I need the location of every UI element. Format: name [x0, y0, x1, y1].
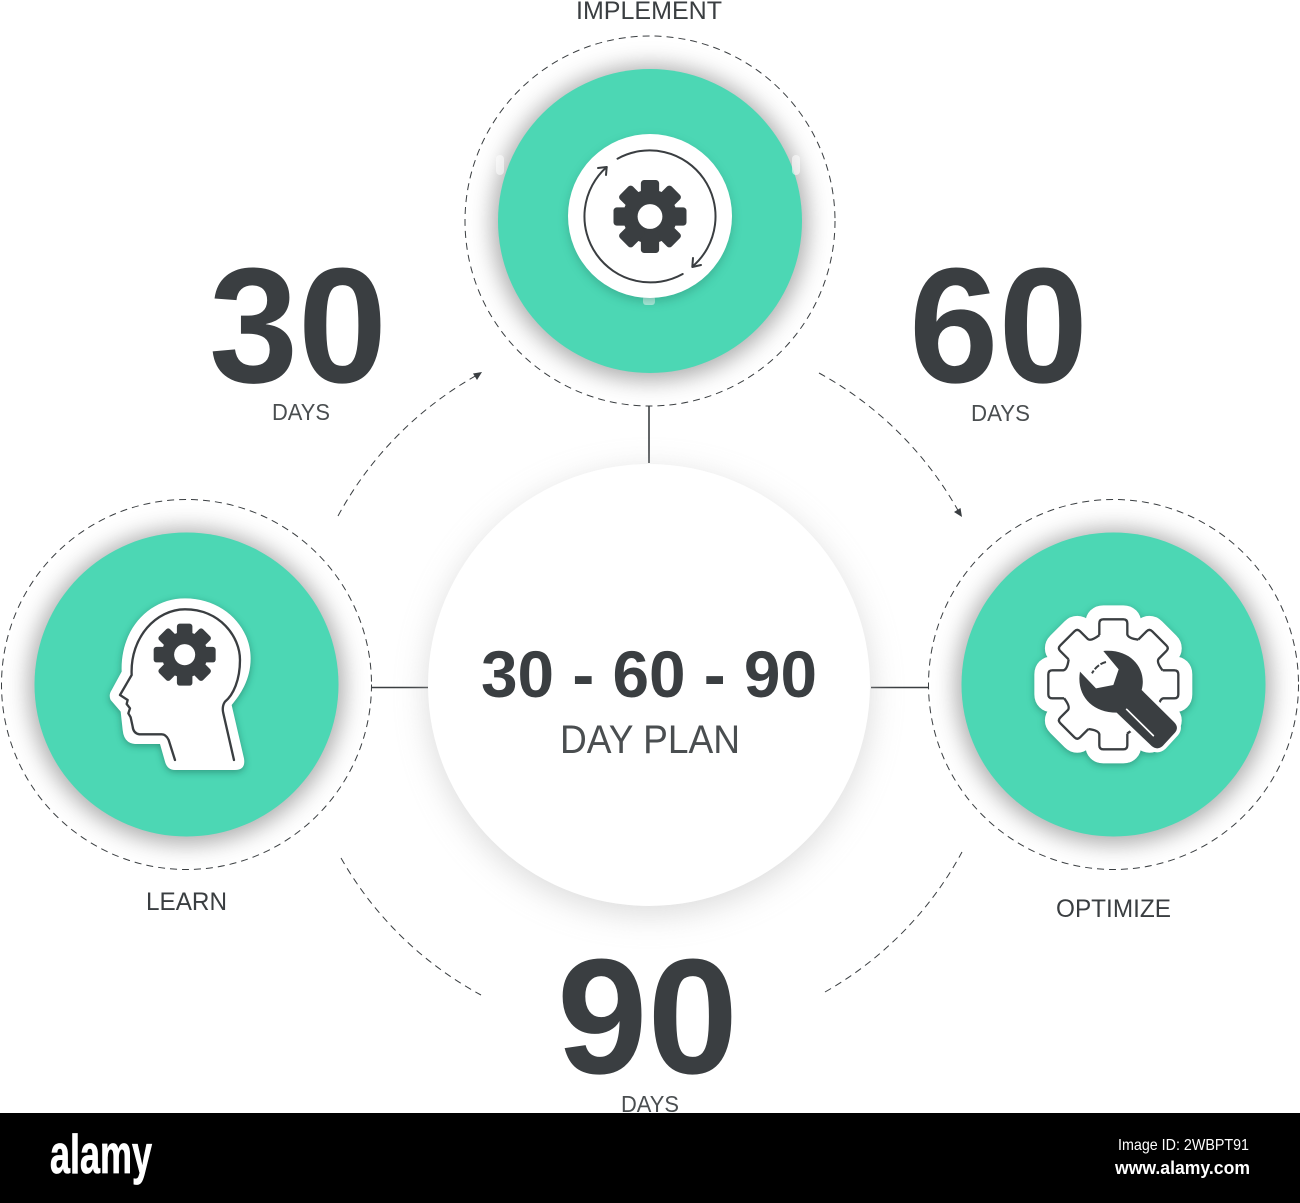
- icon: cycle arrows: [584, 150, 716, 282]
- dashed arc: bottom left: [341, 858, 481, 995]
- icon: gear: [614, 180, 686, 253]
- number: 90 days: 90: [557, 925, 738, 1108]
- centre circle: [428, 464, 870, 914]
- number: 30 days: DAYS: [272, 399, 330, 425]
- number: 90 days: DAYS: [621, 1091, 679, 1117]
- arrow: learn to implement: [338, 372, 482, 516]
- dashed arc: bottom right: [825, 852, 962, 992]
- connector: right node to centre: [871, 686, 928, 688]
- label: learn: LEARN: [146, 888, 227, 916]
- number: 60 days: 60: [909, 234, 1088, 417]
- watermark traces: [496, 155, 800, 305]
- icon: head with gear: [110, 598, 251, 772]
- centre heading: 30 - 60 - 90: [481, 637, 817, 711]
- number: 60 days: DAYS: [971, 400, 1030, 426]
- node: implement: [465, 36, 835, 406]
- arrow: implement to optimize: [819, 373, 962, 517]
- number: 30 days: 30: [209, 234, 387, 417]
- footer bar: [0, 1113, 1300, 1203]
- footer image id: Image ID: 2WBPT91: [1118, 1137, 1249, 1154]
- node: optimize: [928, 500, 1298, 870]
- label: optimize: OPTIMIZE: [1056, 895, 1171, 923]
- footer url: www.alamy.com: [1114, 1158, 1250, 1178]
- centre subheading: DAY PLAN: [560, 718, 740, 762]
- footer logo: alamy: [50, 1123, 152, 1185]
- icon: wrench in gear: [1048, 619, 1178, 751]
- connector: left node to centre: [372, 686, 428, 688]
- node: learn: [2, 500, 372, 870]
- connector: top node to centre: [648, 406, 650, 463]
